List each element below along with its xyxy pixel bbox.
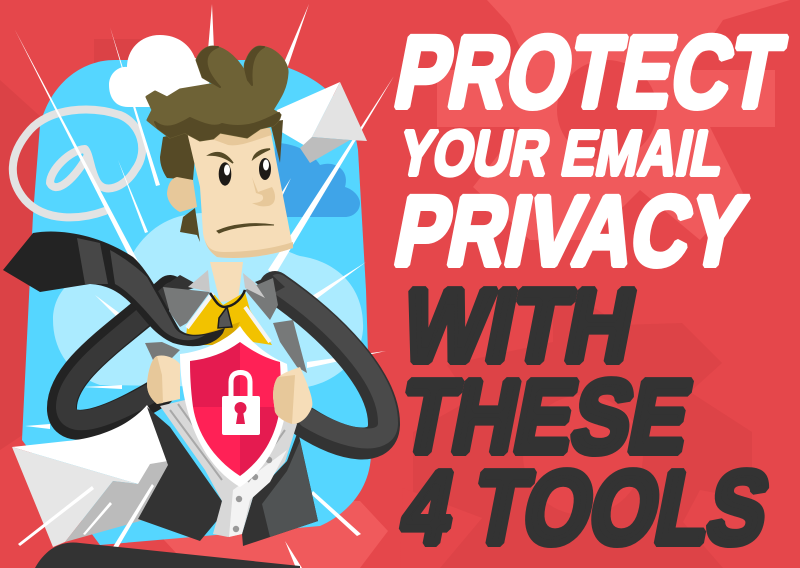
jacket right <box>242 431 318 546</box>
eyebrows <box>209 149 270 163</box>
jacket lapels <box>145 270 307 373</box>
icon: padlock <box>222 372 260 435</box>
shirt buttons <box>233 457 272 532</box>
left arm <box>62 290 172 425</box>
shield <box>180 326 288 487</box>
shirt edge strips <box>187 293 270 342</box>
envelope: lower left <box>12 405 172 568</box>
hero character <box>3 47 388 568</box>
title line: with: WITH <box>394 269 644 384</box>
blue sky panel <box>22 60 371 545</box>
yellow undershirt <box>185 292 272 345</box>
jacket left <box>138 407 222 541</box>
icon: blue cloud <box>275 143 360 217</box>
hair top <box>147 47 287 140</box>
mouth <box>217 224 274 233</box>
eyes <box>219 158 271 186</box>
pale cloud behind hero <box>53 213 363 388</box>
left fist <box>147 355 180 404</box>
necktie flying <box>3 231 225 346</box>
envelope: upper right <box>273 82 367 163</box>
face <box>187 128 293 258</box>
right arm <box>275 284 388 443</box>
rays over envelope <box>18 484 154 568</box>
bottom bar <box>35 542 300 568</box>
ear <box>167 177 197 212</box>
hair back <box>160 120 283 242</box>
jacket shoulders <box>163 275 285 295</box>
tie knot <box>210 290 245 328</box>
right fist <box>273 367 312 424</box>
title line: these: THESE <box>392 360 700 475</box>
title: white heading <box>387 15 792 287</box>
neck <box>210 262 243 302</box>
shirt <box>160 400 297 537</box>
title line: your email: YOUR EMAIL <box>393 118 730 189</box>
icon: white cloud <box>109 35 210 107</box>
nose <box>252 177 275 206</box>
title: dark heading <box>392 269 778 566</box>
icon: at sign <box>13 110 142 217</box>
sun rays <box>15 4 394 568</box>
